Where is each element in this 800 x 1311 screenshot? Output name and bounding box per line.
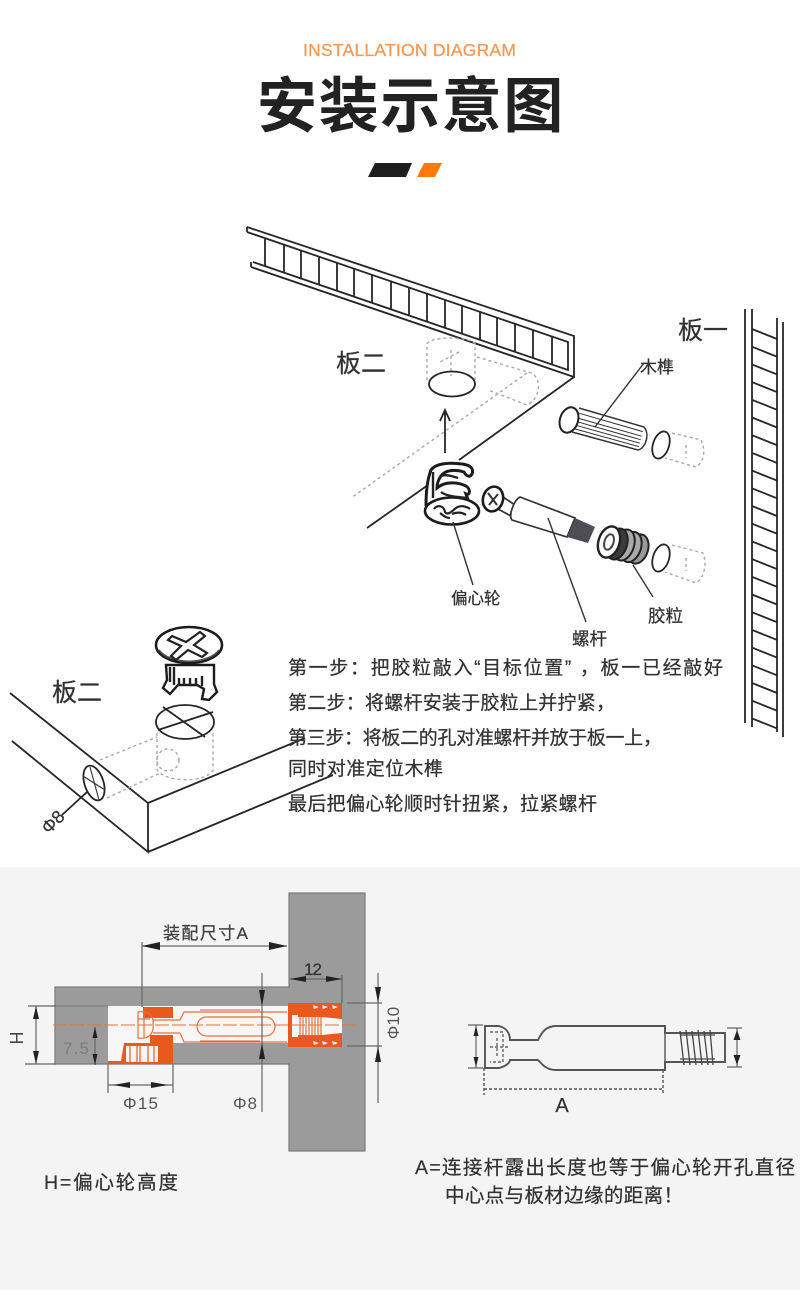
dimension: 12 <box>290 960 342 1003</box>
hidden inner circle <box>157 749 179 771</box>
dimension: head height <box>468 1025 483 1068</box>
board outline <box>10 693 333 852</box>
panel: dimensions background <box>0 867 800 1290</box>
leader: dowel <box>595 363 644 427</box>
cam hole opening <box>429 372 475 396</box>
icon: connecting bolt <box>480 484 595 543</box>
orange insert with thread <box>288 1003 342 1047</box>
dimension: assembly size A <box>142 924 287 1007</box>
bolt head recess <box>490 1032 508 1062</box>
label: board two: 板二 <box>336 350 386 378</box>
icon: plastic insert <box>594 524 652 566</box>
dimension: phi 8 <box>233 973 265 1113</box>
panel: header <box>257 40 565 177</box>
title: 安装示意图 <box>257 73 565 140</box>
cam hole with centre cross <box>156 705 214 739</box>
grey boards <box>25 893 365 1151</box>
leader: cam <box>453 522 473 585</box>
arrow: up into hole <box>440 410 450 453</box>
dimension: H: H <box>6 1032 26 1044</box>
leader: bolt <box>548 518 586 622</box>
note: H definition: H=偏心轮高度 <box>44 1172 178 1194</box>
step 1: 第一步：把胶粒敲入“目标位置” ，板一已经敲好 <box>288 657 723 679</box>
label: dowel: 木榫 <box>640 358 674 377</box>
orange bolt outline <box>138 1010 287 1042</box>
label: diameter 8: Φ8 <box>37 806 69 838</box>
side bolt hole <box>79 763 109 803</box>
dimension: 7.5 <box>63 1027 98 1065</box>
steps text <box>288 657 723 815</box>
leader: bolt hole diameter <box>62 792 87 815</box>
dimension: thread height <box>727 1028 742 1067</box>
dimension: H <box>6 1006 56 1064</box>
step 3 continued: 同时对准定位木榫 <box>288 758 443 780</box>
insert hole in board one <box>649 542 705 583</box>
panel: connecting bolt dimension drawing <box>415 1025 795 1207</box>
icon: fluted wooden dowel <box>556 405 647 450</box>
label: bolt: 螺杆 <box>572 629 607 649</box>
hidden hole outlines <box>100 733 213 798</box>
note: A definition: A=连接杆露出长度也等于偏心轮开孔直径 <box>415 1157 795 1179</box>
panel: board two with cam hole <box>10 627 333 852</box>
bolt outline <box>485 1026 725 1070</box>
label: board two: 板二 <box>52 679 102 707</box>
note: A definition <box>415 1157 795 1207</box>
subtitle: INSTALLATION DIAGRAM <box>303 40 516 60</box>
panel: exploded assembly diagram <box>247 227 783 737</box>
dimension: phi 15: Φ15 <box>123 1094 158 1113</box>
board one, section view <box>745 309 783 737</box>
icon: cam fitting <box>425 463 479 524</box>
label: board one: 板一 <box>678 317 728 345</box>
dimension: phi 10 <box>347 973 403 1103</box>
leader: insert <box>633 565 653 597</box>
step 2: 第二步：将螺杆安装于胶粒上并拧紧， <box>288 692 615 714</box>
label: cam: 偏心轮 <box>451 589 500 608</box>
dimension: phi 15 <box>108 1064 173 1113</box>
step 3: 第三步：将板二的孔对准螺杆并放于板一上， <box>288 727 662 749</box>
note: A definition: 中心点与板材边缘的距离！ <box>445 1185 683 1207</box>
panel: assembly cross-section <box>6 893 403 1151</box>
centre line <box>53 1024 357 1026</box>
dimension: phi 10: Φ10 <box>384 1007 403 1039</box>
dimension: assembly size A: 装配尺寸A <box>163 924 249 943</box>
dimension: A: A <box>555 1095 569 1117</box>
label: insert: 胶粒 <box>648 606 683 626</box>
dimension: 12: 12 <box>304 960 322 979</box>
dimension: 7.5: 7.5 <box>63 1039 89 1058</box>
thread <box>680 1030 715 1065</box>
dimension: A <box>484 1068 663 1117</box>
dimension: phi 8: Φ8 <box>233 1094 257 1113</box>
hidden hole outlines on board two <box>351 338 538 498</box>
dowel hole in board one <box>649 429 704 467</box>
board two, section view <box>247 227 574 528</box>
accent bars <box>368 163 442 177</box>
orange cam section <box>108 1007 173 1064</box>
final step: 最后把偏心轮顺时针扭紧，拉紧螺杆 <box>288 793 597 815</box>
icon: cam fitting <box>156 627 222 700</box>
